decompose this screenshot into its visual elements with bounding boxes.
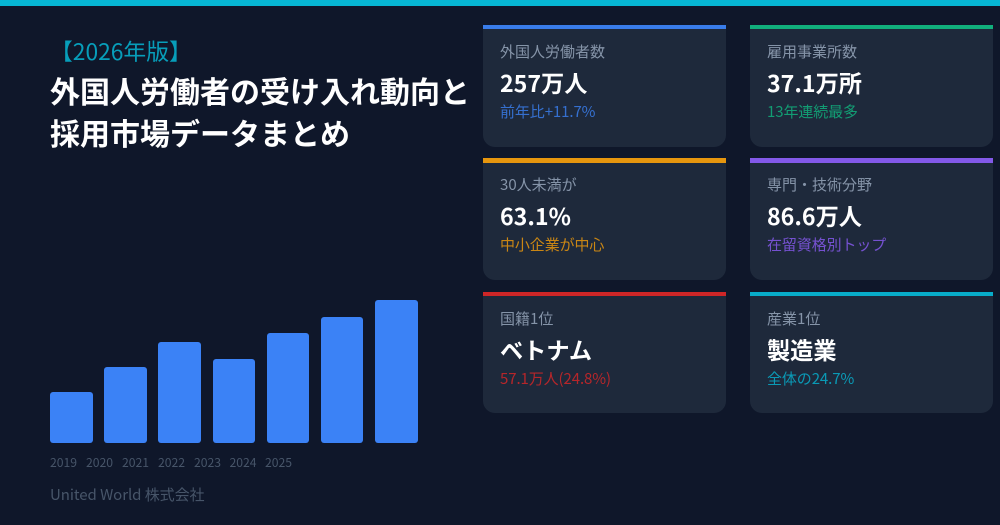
year axis labels: 2024 xyxy=(230,452,257,470)
card: foreign workers: 外国人労働者数 xyxy=(500,41,605,62)
card: employers xyxy=(750,25,993,147)
year axis labels: 2023 xyxy=(194,452,221,470)
card: top nationality: 57.1万人(24.8%) xyxy=(500,368,611,389)
year axis labels: 2020 xyxy=(86,452,113,470)
title: 外国人労働者の受け入れ動向と xyxy=(50,68,470,112)
card: specialist: 専門・技術分野 xyxy=(767,174,872,195)
card: under 30 employees xyxy=(483,158,726,280)
card: top nationality: ベトナム xyxy=(500,332,592,366)
card: specialist: 在留資格別トップ xyxy=(767,234,886,255)
card: employers: 13年連続最多 xyxy=(767,101,858,122)
card: top industry: 製造業 xyxy=(767,332,837,366)
company credit: United World 株式会社 xyxy=(50,484,204,505)
year axis labels: 2025 xyxy=(265,452,292,470)
card: top nationality xyxy=(483,292,726,413)
year axis labels: 2022 xyxy=(158,452,185,470)
card: top industry: 産業1位 xyxy=(767,308,820,329)
card: specialist xyxy=(750,158,993,280)
card: employers: 37.1万所 xyxy=(767,65,862,99)
year axis labels: 2019 xyxy=(50,452,77,470)
year axis labels xyxy=(50,452,292,470)
card: employers: 雇用事業所数 xyxy=(767,41,857,62)
card: top industry: 全体の24.7% xyxy=(767,368,854,389)
top accent bar xyxy=(0,0,1000,6)
card: under 30 employees: 63.1% xyxy=(500,198,571,232)
title: 採用市場データまとめ xyxy=(50,110,350,154)
card: top nationality: 国籍1位 xyxy=(500,308,553,329)
card: foreign workers: 257万人 xyxy=(500,65,587,99)
year axis labels: 2021 xyxy=(122,452,149,470)
card: under 30 employees: 30人未満が xyxy=(500,174,577,195)
tag: 2026 edition: 【2026年版】 xyxy=(50,34,192,67)
card: specialist: 86.6万人 xyxy=(767,198,862,232)
title xyxy=(50,68,470,154)
card: foreign workers xyxy=(483,25,726,147)
card: top industry xyxy=(750,292,993,413)
bar chart xyxy=(50,300,418,443)
card: foreign workers: 前年比+11.7% xyxy=(500,101,595,122)
card: under 30 employees: 中小企業が中心 xyxy=(500,234,604,255)
